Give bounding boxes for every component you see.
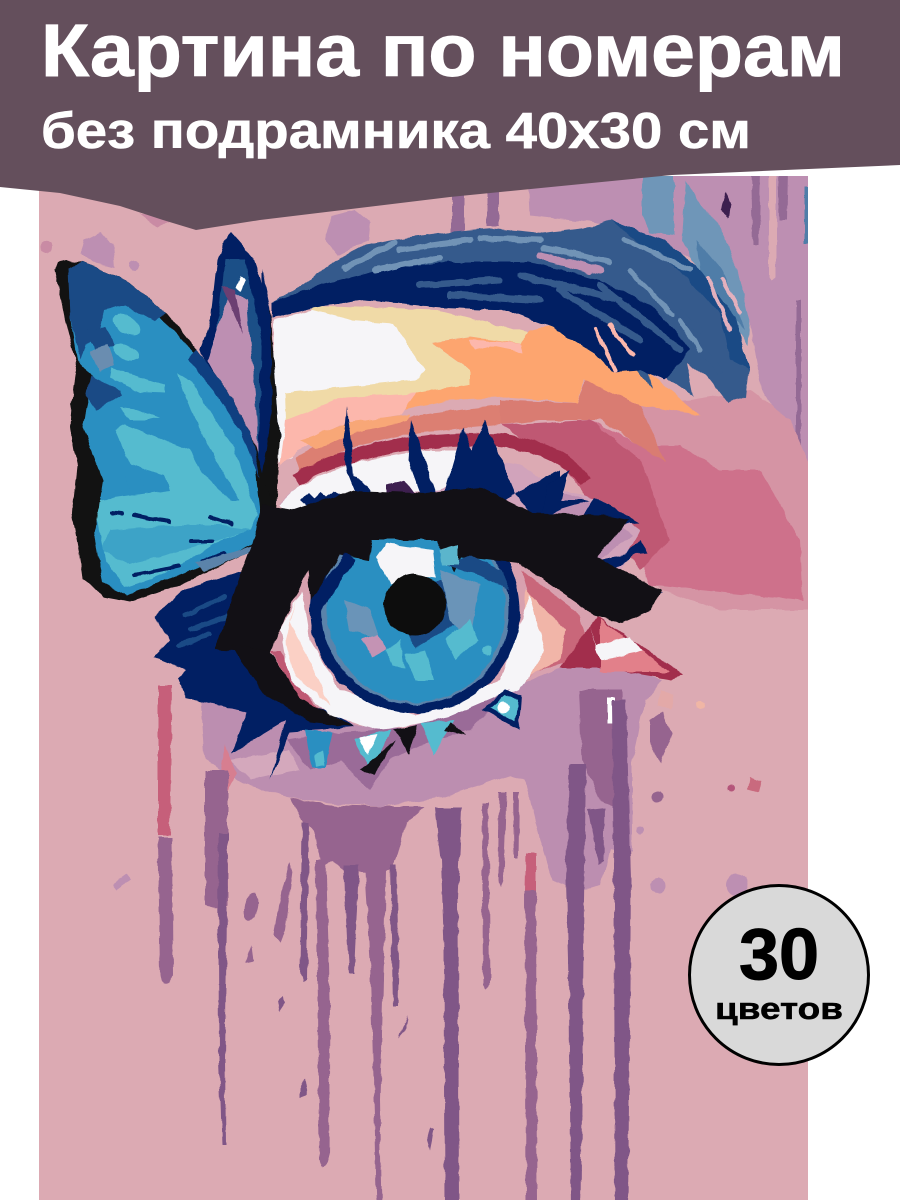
title: main line: Картина по номерам bbox=[41, 9, 845, 92]
eyeshadow bbox=[274, 306, 812, 610]
eyelash: navy spikes above lid bbox=[300, 407, 662, 600]
badge: 30 colours bbox=[690, 886, 868, 1064]
badge label: цветов bbox=[715, 991, 843, 1026]
badge number: 30 bbox=[739, 915, 819, 995]
eyeball bbox=[269, 557, 684, 730]
iris highlight and pupil bbox=[376, 543, 458, 636]
painting: eye with butterfly bbox=[39, 170, 815, 1200]
painted details bbox=[40, 170, 815, 1200]
butterfly: front wing bbox=[55, 260, 282, 602]
iris bbox=[310, 507, 520, 713]
eyelash: navy left and lower bbox=[154, 570, 354, 780]
lash: black upper lid bbox=[215, 487, 661, 727]
paint drips bbox=[158, 685, 631, 1200]
top right paint wash bbox=[452, 170, 815, 480]
butterfly: rear wing bbox=[200, 233, 280, 510]
eyebrow bbox=[272, 220, 749, 403]
paint splashes bbox=[40, 210, 762, 896]
title: subtitle: без подрамника 40х30 см bbox=[41, 102, 751, 159]
lower mauve wash bbox=[200, 660, 672, 890]
lower crystals and lashes bbox=[287, 690, 522, 790]
title banner bbox=[0, 0, 900, 230]
